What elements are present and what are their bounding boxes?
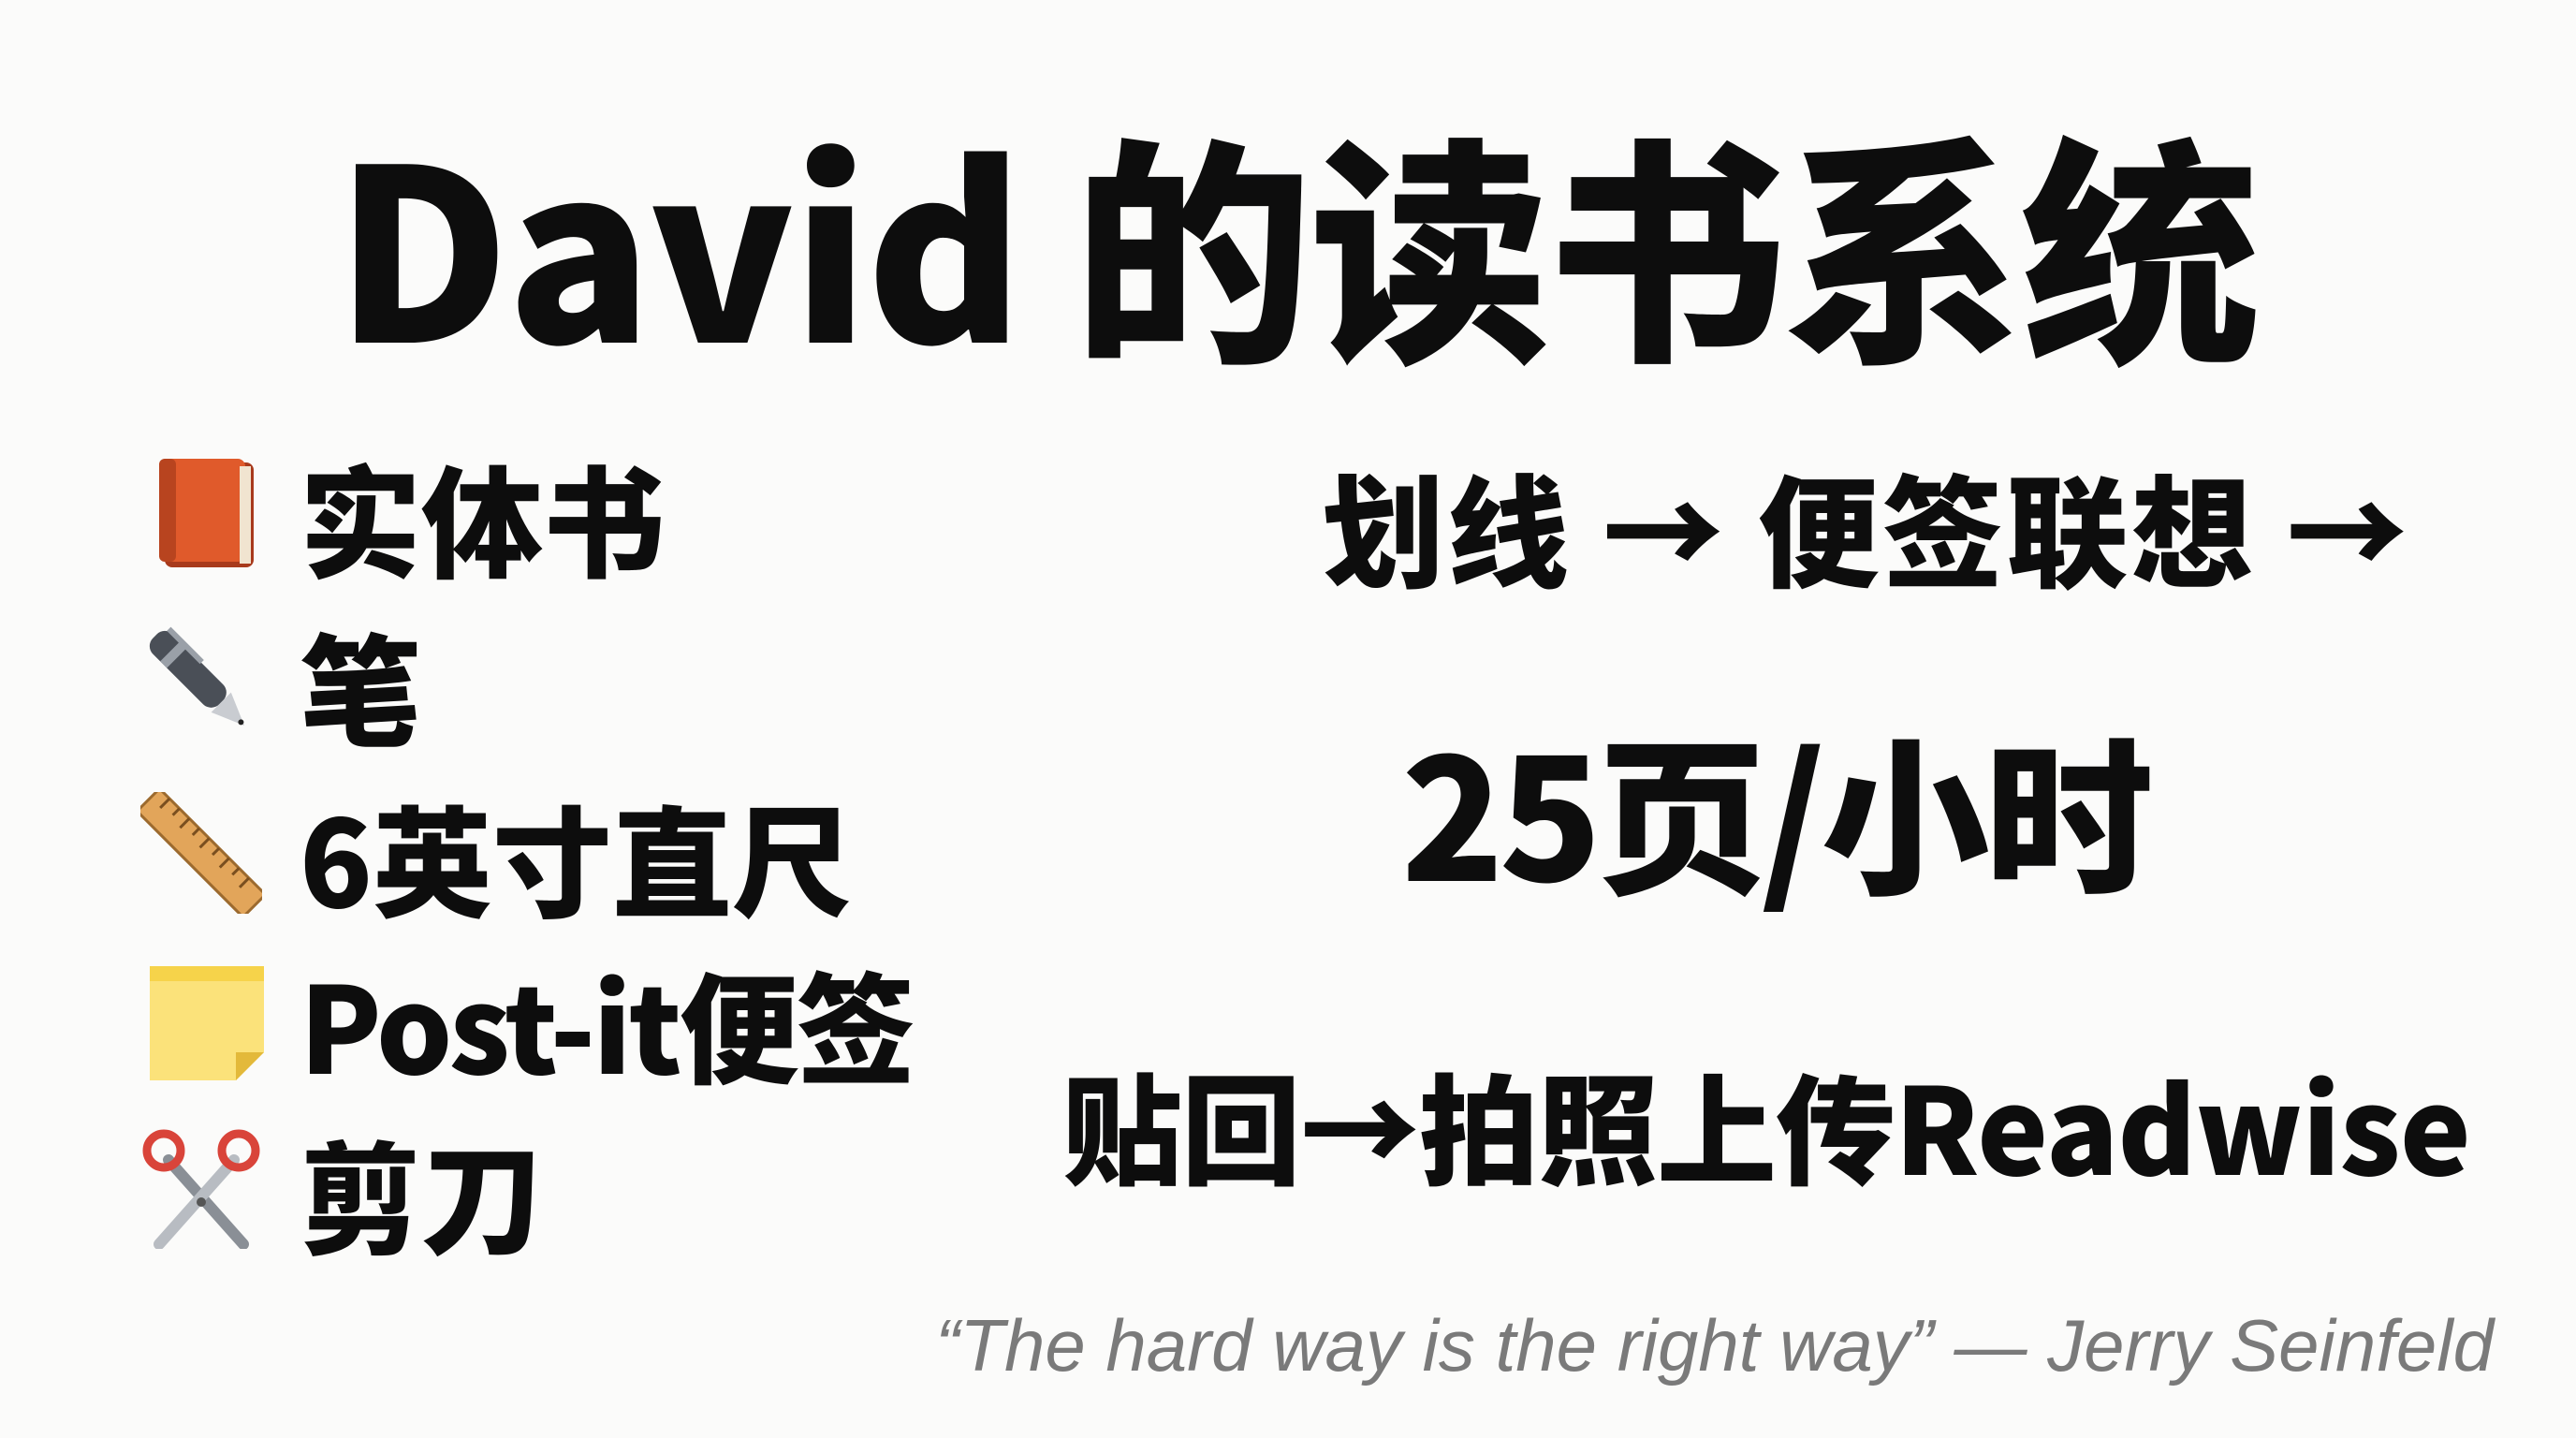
text: Post-it便签: Post-it便签: [300, 935, 914, 1108]
flow line 1: 划线 → 便签联想 →: [1323, 437, 2410, 613]
quote: “The hard way is the right way” — Jerry Seinfeld: [935, 1304, 2494, 1387]
text: 笔: 笔: [300, 596, 421, 772]
tools list: [140, 428, 914, 1280]
text: 剪刀: 剪刀: [300, 1104, 543, 1280]
title: David 的读书系统: [335, 65, 2257, 412]
flow line 2: 贴回→拍照上传Readwise: [1062, 1036, 2470, 1210]
icon: scissors: [142, 1129, 260, 1249]
icon: ruler: [140, 792, 262, 914]
reading speed: 25页/小时: [1401, 685, 2149, 930]
icon: sticky note: [150, 966, 264, 1080]
text: 6英寸直尺: 6英寸直尺: [300, 769, 852, 942]
text: 实体书: 实体书: [300, 428, 665, 604]
icon: pen: [150, 627, 244, 726]
icon: book: [159, 459, 254, 567]
